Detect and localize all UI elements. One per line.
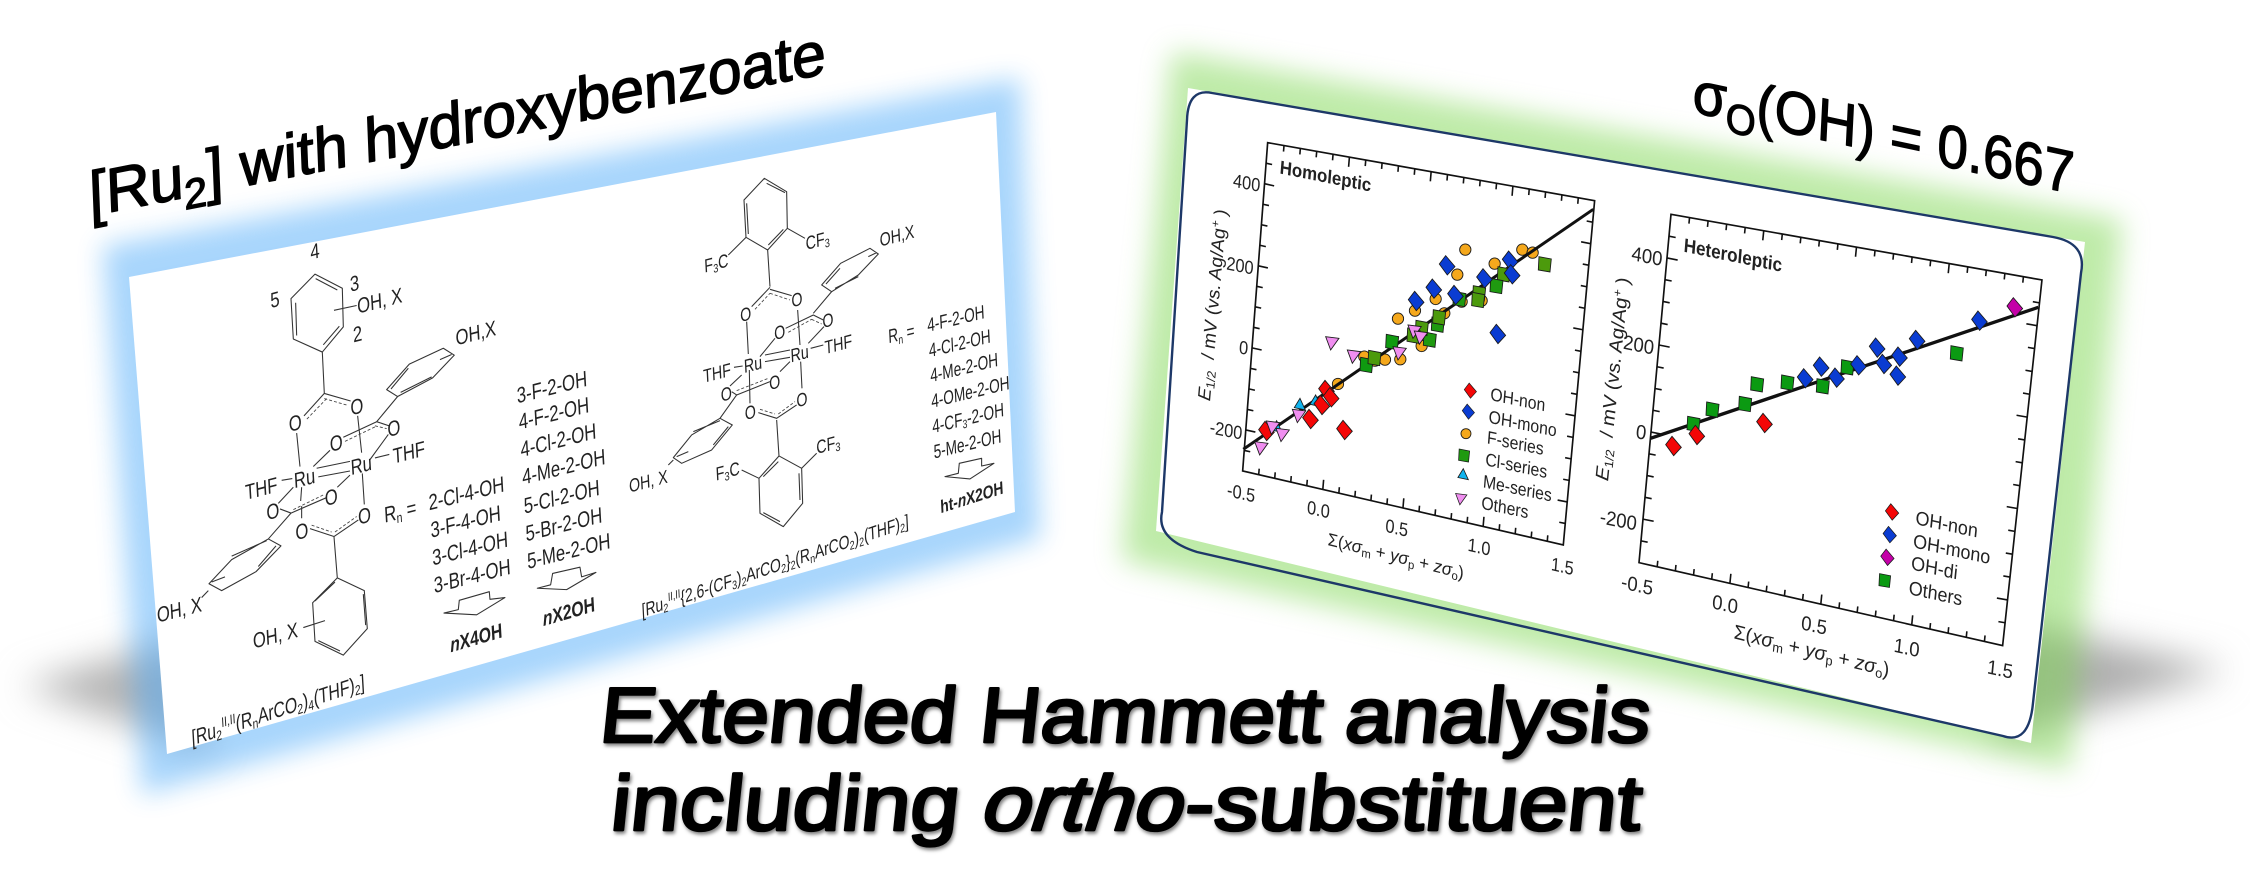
legend homoleptic: Me-series	[1482, 471, 1553, 506]
atom labels of homoleptic complex: O	[350, 393, 364, 421]
formula heteroleptic: )	[736, 567, 742, 590]
atom labels of homoleptic complex: 4	[310, 239, 320, 265]
series OH-mono	[1797, 311, 1987, 388]
formula heteroleptic: 2	[859, 535, 865, 550]
substituent labels heteroleptic: 3	[835, 440, 841, 455]
atom labels of homoleptic complex: O	[295, 518, 309, 546]
series Others	[1255, 325, 1428, 455]
y axis title: )	[1210, 207, 1231, 223]
y axis title: E	[1592, 464, 1614, 483]
atom labels heteroleptic: O	[822, 309, 834, 333]
atom labels heteroleptic	[703, 288, 853, 425]
atom labels heteroleptic: O	[720, 382, 732, 406]
formula heteroleptic: 2	[741, 575, 747, 590]
x axis title: +	[1414, 550, 1435, 575]
atom labels of homoleptic complex: Ru	[293, 464, 316, 494]
label nX4OH: nX4OH	[450, 618, 503, 657]
x axis numbers: 0.0	[1711, 591, 1739, 619]
formula heteroleptic: ArCO	[746, 554, 781, 586]
atom labels of homoleptic complex: THF	[392, 437, 426, 469]
substituent list nX4OH: 3-Cl-4-OH	[432, 527, 509, 571]
formula homoleptic: 4	[308, 697, 315, 714]
x axis title: +	[1832, 646, 1856, 673]
formula heteroleptic: 2	[849, 538, 855, 553]
substituent list nX2OH: 5-Cl-2-OH	[523, 476, 600, 519]
series OH-non	[1666, 413, 1772, 456]
label ht-nX2OH: ht-nX2OH	[940, 478, 1004, 518]
atom labels heteroleptic: Ru	[790, 341, 809, 367]
formula heteroleptic: [Ru	[641, 593, 664, 622]
substituent labels	[156, 283, 497, 654]
series OH-mono	[1408, 251, 1520, 344]
x axis title: zσ	[1853, 651, 1878, 679]
x axis numbers: -0.5	[1226, 479, 1256, 507]
x axis title: +	[1782, 633, 1806, 661]
arrow to nX4OH	[444, 592, 505, 615]
atom labels heteroleptic: O	[744, 401, 756, 425]
blue glow behind left panel	[103, 78, 1040, 795]
legend homoleptic: F-series	[1486, 427, 1544, 459]
series Cl-series	[1360, 257, 1551, 373]
x axis numbers: 1.0	[1893, 634, 1921, 662]
substituent list nX2OH: 5-Br-2-OH	[525, 503, 603, 547]
substituent labels heteroleptic: C	[718, 250, 729, 273]
y axis title: / mV (vs. Ag/Ag	[1197, 226, 1229, 372]
substituent list nX2OH: 4-Me-2-OH	[522, 445, 606, 490]
substituent labels heteroleptic: C	[729, 458, 740, 481]
y axis title: 1/2	[1204, 369, 1219, 390]
substituent labels heteroleptic: F	[715, 462, 725, 485]
formula homoleptic: (THF)	[313, 674, 355, 711]
label nX2OH: nX2OH	[542, 592, 596, 631]
legend homoleptic	[1456, 383, 1557, 523]
formula heteroleptic: 2	[781, 562, 786, 577]
formula heteroleptic: 2	[790, 558, 796, 573]
substituent labels heteroleptic	[628, 221, 915, 497]
x axis numbers: 1.0	[1467, 534, 1491, 560]
y axis numbers: 400	[1630, 242, 1664, 271]
x axis title: m	[1361, 545, 1372, 562]
y axis title: +	[1611, 288, 1624, 298]
x axis title: p	[1408, 557, 1415, 573]
x axis title: yσ	[1802, 638, 1828, 666]
substituent list nX4OH: n	[396, 509, 403, 527]
x axis title: p	[1825, 652, 1833, 669]
atom labels of homoleptic complex: O	[357, 503, 372, 530]
chart: homoleptic	[1193, 143, 1595, 585]
formula homoleptic: ArCO	[257, 693, 298, 729]
axis ticks	[1244, 146, 1593, 541]
y axis title: +	[1208, 219, 1222, 229]
substituent labels heteroleptic: OH,X	[879, 221, 915, 251]
substituent list ht-nX2OH	[888, 301, 1010, 463]
x axis title: o	[1451, 568, 1459, 584]
substituent labels: OH,X	[455, 316, 497, 351]
x axis title: )	[1882, 658, 1890, 682]
y axis title: )	[1612, 275, 1634, 292]
formula heteroleptic: (R	[795, 544, 810, 570]
substituent list nX4OH: 3-Br-4-OH	[433, 555, 511, 599]
delocalised bonds heteroleptic	[737, 293, 822, 414]
formula homoleptic: 2	[297, 700, 304, 718]
legend heteroleptic: OH-mono	[1912, 530, 1991, 568]
legend heteroleptic: OH-di	[1910, 552, 1959, 583]
plot title: Homoleptic	[1279, 157, 1372, 196]
substituent labels heteroleptic: 3	[713, 262, 719, 276]
formula homoleptic: II,II	[221, 710, 236, 731]
formula homoleptic: ]	[360, 671, 365, 696]
substituent list nX2OH: 5-Me-2-OH	[527, 529, 611, 575]
x axis title: )	[1457, 561, 1465, 583]
ground shadow right	[2000, 618, 2228, 738]
bonds of heteroleptic complex	[668, 178, 878, 527]
x axis numbers: -0.5	[1620, 571, 1654, 600]
series Others	[1687, 346, 1963, 432]
chart: heteroleptic	[1591, 214, 2042, 684]
title: Ru2 with hydroxybenzoate: [Ru	[88, 143, 185, 230]
y axis numbers: -200	[1209, 416, 1243, 444]
panel: ruthenium complex structures	[129, 112, 1015, 754]
substituent list nX4OH	[384, 472, 511, 599]
title: Ru2 with hydroxybenzoate: 2	[183, 167, 208, 219]
substituent list ht-nX2OH: 4-Cl-2-OH	[928, 325, 991, 362]
substituent list ht-nX2OH: =	[902, 320, 915, 344]
formula homoleptic: [Ru	[191, 720, 217, 751]
atom labels of homoleptic complex: O	[288, 410, 302, 438]
atom labels heteroleptic: O	[740, 303, 752, 327]
atom labels heteroleptic: O	[774, 321, 786, 345]
panel: Hammett plots	[1156, 88, 2085, 743]
substituent labels heteroleptic: 3	[724, 470, 730, 484]
y axis numbers: 200	[1622, 331, 1655, 360]
x axis numbers: 0.5	[1800, 612, 1828, 640]
legend heteroleptic: OH-non	[1915, 507, 1979, 542]
plot frame	[1243, 143, 1595, 545]
substituent list ht-nX2OH: 4-CF	[932, 409, 963, 438]
substituent labels heteroleptic: CF	[805, 228, 825, 254]
atom labels heteroleptic: Ru	[743, 352, 763, 377]
formula heteroleptic: {2,6-(CF	[680, 570, 732, 609]
atom labels of homoleptic complex: O	[387, 415, 401, 443]
y axis numbers: 0	[1238, 336, 1249, 359]
atom labels heteroleptic: O	[796, 388, 808, 412]
plot frame	[1639, 214, 2042, 646]
title: Extended Hammett analysis including ortho-substituent: Extended Hammett analysis	[596, 671, 1655, 759]
substituent list nX2OH: 4-Cl-2-OH	[520, 419, 597, 463]
x axis numbers	[1226, 479, 1575, 579]
substituent labels heteroleptic: CF	[816, 432, 836, 458]
green glow behind right panel	[1122, 52, 2122, 770]
formula homoleptic: n	[252, 715, 259, 732]
fit line homoleptic	[1243, 209, 1593, 449]
legend homoleptic: Cl-series	[1485, 449, 1548, 482]
legend homoleptic: Others	[1481, 493, 1529, 523]
delocalised carboxylate bonds	[293, 399, 387, 532]
legend homoleptic: OH-non	[1490, 384, 1546, 416]
series Me-series	[1271, 395, 1321, 432]
x axis title: Σ(xσ	[1733, 621, 1774, 653]
series OH-non	[1259, 380, 1352, 441]
x axis title: o	[1875, 665, 1883, 681]
x axis numbers	[1620, 571, 2014, 684]
y axis numbers	[1209, 170, 1261, 444]
structure: homoleptic complex	[156, 239, 611, 752]
substituent list ht-nX2OH: 4-Me-2-OH	[930, 349, 999, 387]
y axis numbers	[1599, 242, 1664, 536]
atom labels of homoleptic complex	[244, 239, 426, 546]
formula heteroleptic: 3	[732, 578, 737, 593]
legend heteroleptic: Others	[1908, 577, 1963, 610]
atom labels heteroleptic: THF	[703, 359, 731, 387]
substituent labels: OH, X	[357, 283, 403, 319]
x axis title: m	[1772, 639, 1784, 657]
y axis title: 1/2	[1601, 448, 1617, 469]
formula heteroleptic: 2	[900, 521, 905, 536]
ground shadow left	[22, 636, 210, 752]
x axis title: +	[1370, 540, 1391, 565]
series F-series	[1332, 244, 1538, 390]
substituent list nX2OH	[516, 367, 611, 575]
formula heteroleptic: (THF)	[863, 513, 900, 547]
substituent list nX4OH: R	[384, 501, 397, 528]
arrow to ht-nX2OH	[945, 458, 994, 479]
x axis numbers: 0.0	[1306, 496, 1331, 523]
x axis title: Σ(xσ	[1327, 529, 1363, 558]
substituent labels: OH, X	[156, 592, 203, 628]
formula heteroleptic: }	[785, 550, 791, 573]
substituent list ht-nX2OH: 5-Me-2-OH	[933, 425, 1002, 463]
legend heteroleptic	[1879, 504, 1991, 610]
atom labels of homoleptic complex: Ru	[350, 451, 373, 481]
title: Ru2 with hydroxybenzoate: ] with hydroxybenzoate	[205, 19, 827, 207]
title: sigma o (OH) value: (OH) = 0.667	[1755, 72, 2076, 207]
plot title: Heteroleptic	[1683, 234, 1783, 276]
x axis title: zσ	[1432, 555, 1454, 580]
x axis numbers: 1.5	[1986, 656, 2014, 684]
y axis numbers: 200	[1226, 252, 1255, 279]
substituent list ht-nX2OH: -2-OH	[967, 399, 1004, 429]
formula homoleptic: 2	[355, 681, 361, 699]
substituent labels: OH, X	[252, 618, 299, 654]
title: sigma o (OH) value: σ	[1691, 58, 1731, 133]
formula heteroleptic: )	[854, 527, 859, 550]
title: sigma o (OH) value: O	[1725, 93, 1757, 147]
atom labels of homoleptic complex: 2	[352, 321, 363, 348]
y axis title: / mV (vs. Ag/Ag	[1595, 295, 1632, 451]
substituent list ht-nX2OH: R	[888, 324, 899, 348]
substituent list ht-nX2OH: n	[898, 334, 904, 348]
structure: heteroleptic complex	[628, 178, 1010, 624]
formula heteroleptic: II,II	[668, 587, 681, 605]
formula homoleptic: 2	[216, 727, 223, 744]
x axis numbers: 0.5	[1385, 515, 1409, 541]
panel rounded border	[1161, 92, 2082, 738]
atom labels of homoleptic complex: 5	[270, 287, 280, 314]
x axis title: yσ	[1388, 544, 1411, 570]
atom labels heteroleptic: O	[769, 371, 781, 395]
y axis title: E	[1194, 385, 1215, 402]
substituent list nX4OH: =	[401, 496, 417, 524]
fit line heteroleptic	[1651, 307, 2038, 438]
atom labels heteroleptic: THF	[824, 330, 853, 359]
formula heteroleptic: n	[810, 552, 816, 567]
y axis numbers: -200	[1599, 506, 1638, 536]
title: Extended Hammett analysis including ortho-substituent	[596, 671, 1655, 847]
substituent list nX4OH: 3-F-4-OH	[430, 501, 501, 543]
legend homoleptic: OH-mono	[1488, 407, 1557, 441]
atom labels of homoleptic complex: O	[266, 498, 280, 526]
formula heteroleptic: ]	[904, 510, 909, 533]
formula heteroleptic: 2	[663, 601, 669, 616]
axis ticks	[1641, 218, 2039, 641]
series OH-di	[2007, 298, 2023, 317]
title: Extended Hammett analysis including ortho-substituent: including ortho-substituent	[607, 759, 1647, 847]
y axis numbers: 0	[1635, 420, 1647, 445]
substituent labels heteroleptic: 3	[825, 236, 830, 251]
substituent list ht-nX2OH: 4-OMe-2-OH	[931, 372, 1010, 413]
atom labels of homoleptic complex: O	[324, 484, 338, 512]
bonds of homoleptic complex	[202, 274, 454, 655]
formula heteroleptic: ArCO	[814, 530, 850, 563]
substituent list ht-nX2OH: 4-F-2-OH	[927, 301, 985, 337]
atom labels of homoleptic complex: THF	[244, 473, 278, 506]
substituent labels heteroleptic: OH, X	[628, 466, 668, 497]
substituent list nX2OH: 3-F-2-OH	[516, 367, 588, 409]
formula homoleptic: (R	[235, 708, 253, 737]
atom labels of homoleptic complex: O	[329, 430, 343, 458]
substituent list ht-nX2OH: 3	[962, 418, 968, 432]
substituent list nX4OH: 2-Cl-4-OH	[428, 472, 505, 516]
panel background	[129, 112, 1015, 754]
formula homoleptic: )	[302, 690, 309, 715]
x axis numbers: 1.5	[1550, 553, 1575, 579]
panel background	[1156, 88, 2085, 743]
arrow to nX2OH	[537, 567, 596, 590]
substituent labels heteroleptic: F	[704, 254, 714, 277]
y axis numbers: 400	[1232, 170, 1261, 196]
substituent list nX2OH: 4-F-2-OH	[518, 393, 590, 435]
atom labels of homoleptic complex: 3	[349, 271, 360, 297]
atom labels heteroleptic: O	[791, 288, 803, 312]
